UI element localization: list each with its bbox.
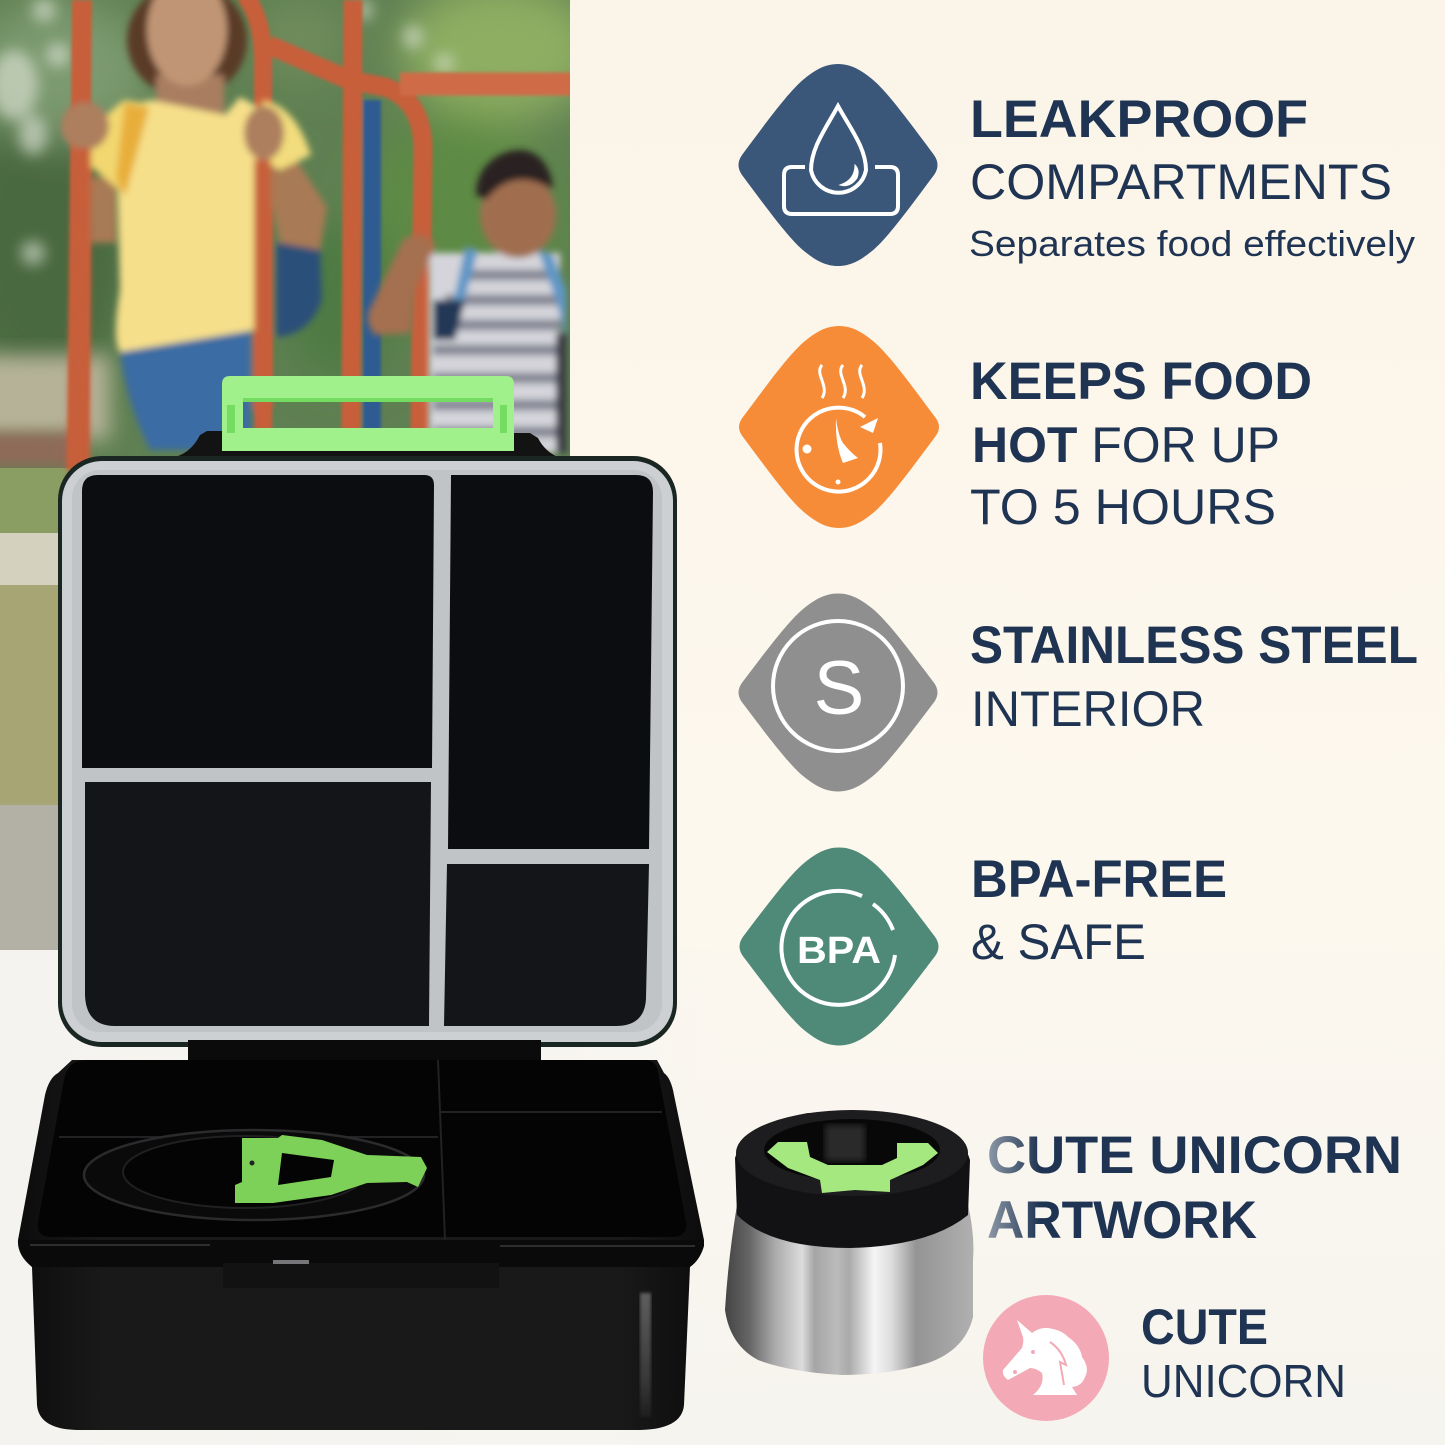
lid xyxy=(735,1113,970,1248)
icon: unicorn xyxy=(983,1295,1109,1421)
heading: LEAKPROOF xyxy=(970,90,1308,149)
icon: BPA badge: BPA xyxy=(797,930,881,972)
heading line 1: CUTE UNICORN xyxy=(987,1126,1402,1185)
food jar xyxy=(725,1110,973,1375)
green clip xyxy=(235,1135,427,1203)
lid hinge xyxy=(170,431,560,458)
steel body xyxy=(725,1205,973,1375)
feature: unicorn artwork xyxy=(983,1126,1402,1421)
feature: keeps food hot xyxy=(739,326,1312,535)
icon: S in circle: S xyxy=(814,646,864,731)
rim and latch xyxy=(20,1240,704,1267)
description: Separates food effectively xyxy=(969,223,1415,264)
compartment: bottom right xyxy=(444,864,649,1026)
lunchbox xyxy=(18,376,704,1430)
girl in yellow shirt xyxy=(61,0,327,470)
heading: BPA-FREE xyxy=(971,850,1227,909)
stowed jar lid xyxy=(84,1130,424,1220)
table surface xyxy=(0,950,740,1445)
green clip xyxy=(767,1142,938,1193)
subheading line 1: HOT FOR UP xyxy=(972,417,1280,473)
heading: KEEPS FOOD xyxy=(970,352,1312,411)
subheading: & SAFE xyxy=(971,914,1146,970)
box exterior xyxy=(18,1060,704,1430)
subheading line 2: TO 5 HOURS xyxy=(970,479,1276,535)
lid opening xyxy=(764,1119,940,1181)
compartment: bottom left xyxy=(85,782,431,1026)
boy with backpack xyxy=(368,150,567,453)
icon: clock with steam xyxy=(739,326,939,528)
heading: STAINLESS STEEL xyxy=(970,616,1418,675)
feature: stainless steel xyxy=(738,594,1418,791)
interior tray xyxy=(38,1060,686,1237)
compartment: top left xyxy=(82,475,434,768)
handle xyxy=(222,376,514,451)
open box base xyxy=(18,1040,704,1430)
lid frame xyxy=(58,456,677,1047)
subheading: COMPARTMENTS xyxy=(970,154,1392,210)
photo: children at playground xyxy=(0,0,600,950)
subheading: INTERIOR xyxy=(971,681,1205,737)
feature: BPA free xyxy=(740,848,1227,1045)
compartment: top right xyxy=(448,475,653,849)
icon: BPA badge xyxy=(740,848,938,1045)
playground frame xyxy=(78,0,590,470)
icon: water drop xyxy=(738,64,938,266)
heading line 2: ARTWORK xyxy=(987,1191,1257,1250)
background ground xyxy=(0,355,110,950)
label line 1: CUTE xyxy=(1141,1299,1268,1355)
label line 2: UNICORN xyxy=(1141,1355,1346,1407)
icon: S in circle xyxy=(738,594,938,791)
background bokeh xyxy=(0,0,454,265)
feature: leakproof xyxy=(738,64,1415,266)
tray dividers xyxy=(59,1060,662,1240)
